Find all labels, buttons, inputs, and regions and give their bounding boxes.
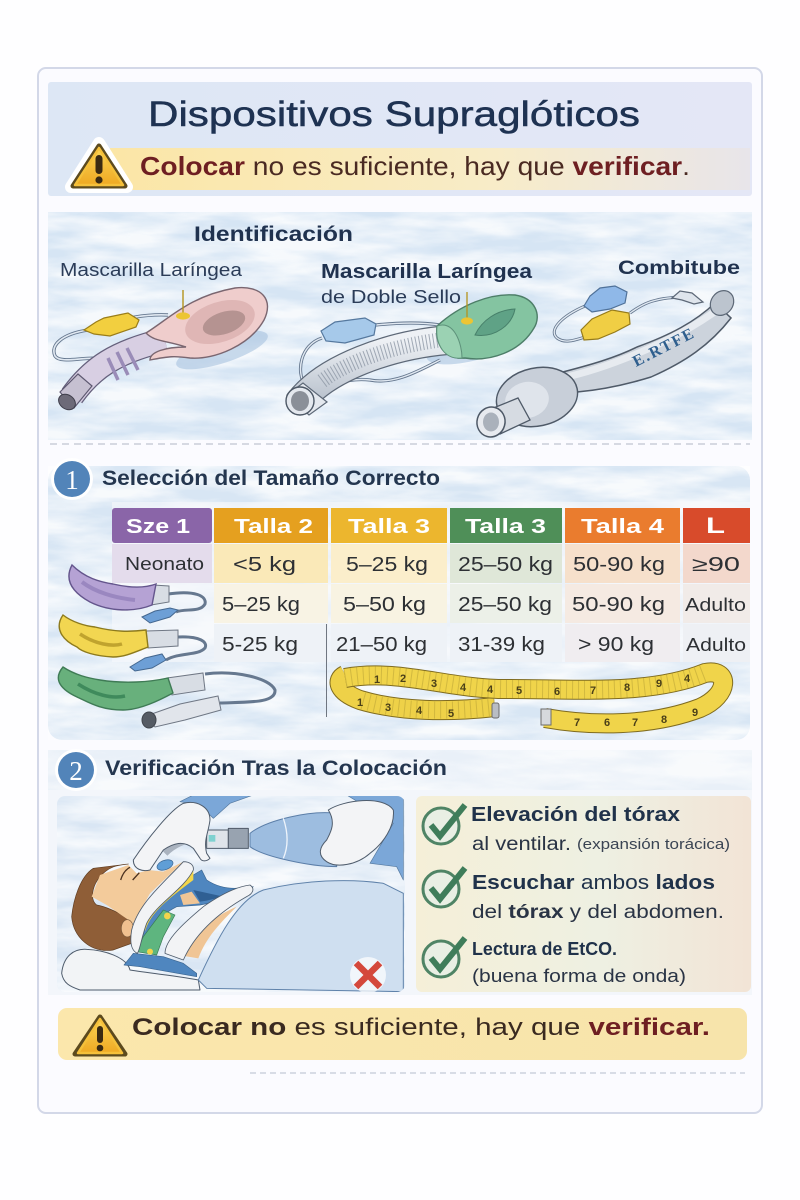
- table header row: Talla 2: [234, 516, 313, 538]
- row 3: 21–50 kg: [336, 634, 427, 656]
- bottom banner: [58, 1008, 747, 1060]
- device: mascarilla laríngea: [54, 288, 272, 413]
- table: tallas: [112, 502, 750, 662]
- tape measure: 6: [554, 686, 560, 698]
- icon: number 1: [51, 458, 93, 500]
- row 1: 5–25 kg: [346, 554, 428, 576]
- right sleeve: [347, 795, 403, 880]
- tape measure: 1: [374, 674, 380, 686]
- icon: warning triangle: [71, 143, 127, 187]
- tape measure: 5: [516, 685, 522, 697]
- table header row: Talla 4: [581, 516, 665, 538]
- header panel: [48, 82, 752, 196]
- device: mascarilla amarilla: [59, 615, 206, 671]
- row 1: [112, 544, 750, 583]
- row 3: Adulto: [686, 635, 746, 655]
- table header row: L: [706, 513, 725, 538]
- tape measure: 1: [357, 697, 363, 709]
- warning text: Colocar no es suficiente, hay que verificar .: [140, 151, 690, 181]
- tape measure: 7: [632, 717, 638, 729]
- left glove: [133, 802, 210, 871]
- row 2: [214, 584, 750, 623]
- check item 1: Elevación del tórax: [471, 804, 680, 826]
- row 3: > 90 kg: [578, 634, 654, 656]
- row 1: 50-90 kg: [573, 554, 665, 576]
- icon: number 1: 1: [65, 465, 79, 495]
- page card: [38, 68, 762, 1113]
- warning banner: [71, 143, 750, 190]
- panel: verificación: [48, 749, 752, 995]
- panel: checklist: [416, 796, 751, 992]
- face: [92, 862, 183, 923]
- row 1: Neonato: [125, 554, 204, 574]
- hair: [72, 864, 132, 950]
- icon: number 2: [55, 749, 97, 791]
- right glove: [320, 801, 393, 865]
- ear: [121, 920, 133, 937]
- tape measure: 3: [385, 702, 391, 714]
- row 1: <5 kg: [233, 554, 296, 576]
- tape measure: 4: [416, 705, 423, 717]
- tape measure: 9: [692, 707, 698, 719]
- icon: red cross: [350, 957, 386, 993]
- label: mascarilla laríngea: Mascarilla Laríngea: [60, 260, 243, 280]
- tape measure: 3: [431, 678, 437, 690]
- label: mascarilla de doble sello: Mascarilla Laríngea: [321, 261, 533, 283]
- tape measure: 9: [656, 678, 662, 690]
- row 1: 25–50 kg: [458, 554, 553, 576]
- tape measure: 2: [400, 673, 406, 685]
- sleeves: [180, 795, 253, 818]
- icon: warning triangle: [75, 1017, 125, 1054]
- table header row: Sze 1: [126, 516, 190, 538]
- tape measure: 7: [590, 685, 596, 697]
- banner text: Colocar no es suficiente, hay que verificar.: [132, 1014, 710, 1041]
- title: Dispositivos Supraglóticos: [148, 95, 640, 134]
- check item 3: (buena forma de onda): [472, 966, 686, 986]
- label: combitube: Combitube: [618, 258, 740, 279]
- tape measure: 4: [487, 684, 494, 696]
- tape measure: 5: [448, 708, 454, 720]
- airway tube: [163, 844, 185, 856]
- blanket: [198, 881, 403, 992]
- check item 3: [423, 938, 686, 986]
- tape measure: 4: [460, 682, 467, 694]
- device lettering: E.RTFE: [630, 325, 697, 371]
- device: mascarilla de doble sello: [286, 292, 537, 415]
- row 3: 31-39 kg: [458, 634, 545, 656]
- device: mascarilla verde: [58, 667, 275, 728]
- table header row: [112, 508, 750, 543]
- label: mascarilla de doble sello: [321, 261, 533, 307]
- heading: verificación: Verificación Tras la Colocación: [105, 757, 447, 780]
- row 2: 5–25 kg: [222, 594, 300, 616]
- check item 2: Escuchar ambos lados: [472, 872, 715, 894]
- tape measure: [340, 672, 723, 729]
- tape measure: 4: [684, 673, 691, 685]
- illustration: ventilación del paciente: [57, 795, 405, 993]
- panel: identificación: [48, 212, 752, 440]
- label: mascarilla de doble sello: de Doble Sello: [321, 287, 461, 307]
- chest skin: [186, 906, 236, 958]
- row 2: 5–50 kg: [343, 594, 426, 616]
- mask cuff in mouth: [156, 859, 174, 871]
- table header row: Talla 3: [348, 516, 430, 538]
- tape measure: 7: [574, 717, 580, 729]
- row 1: ≥90: [692, 554, 740, 576]
- eyebrow and eye: [121, 867, 139, 880]
- collar base: [124, 953, 197, 977]
- tape measure: 8: [661, 714, 667, 726]
- tape measure: 6: [604, 717, 610, 729]
- check item 1: (expansión torácica): [577, 836, 730, 853]
- row 3: [214, 624, 750, 662]
- panel: selección del tamaño: [48, 458, 750, 740]
- device: mascarilla morada: [69, 565, 205, 623]
- check item 2: [423, 868, 724, 923]
- row 2: 25–50 kg: [458, 594, 552, 616]
- row 2: 50-90 kg: [572, 594, 665, 616]
- heading: selección: Selección del Tamaño Correcto: [102, 467, 440, 490]
- tape measure: 8: [624, 682, 630, 694]
- check item 1: [423, 804, 730, 855]
- pillow: [62, 949, 200, 990]
- row 2: Adulto: [685, 595, 746, 615]
- check item 3: Lectura de EtCO.: [472, 939, 617, 959]
- row 3: 5-25 kg: [222, 634, 298, 656]
- table header row: Talla 3: [465, 516, 546, 538]
- icon: number 2: 2: [69, 756, 83, 786]
- check item 2: del tórax y del abdomen.: [472, 902, 724, 923]
- ventilation bag: [207, 813, 337, 867]
- heading: identificación: Identificación: [194, 223, 353, 246]
- device: combitube: [474, 286, 738, 440]
- cervical collar: [131, 862, 253, 960]
- check item 1: al ventilar.: [472, 834, 571, 855]
